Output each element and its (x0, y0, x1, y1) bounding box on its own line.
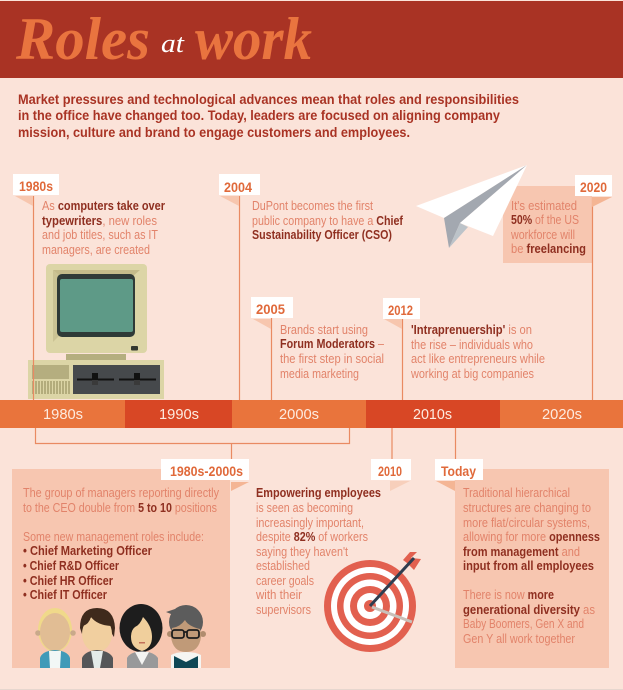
panel: 1980s-2000s: Some new management roles include: (23, 529, 204, 544)
event: 2020: 2020 (580, 179, 607, 195)
panel: today: Gen Y all work together (463, 631, 576, 646)
panel: today: from management and (463, 544, 580, 559)
intro text: Market pressures and technological advances mean that roles and responsibilities (18, 91, 519, 107)
timeline band: 2000s (279, 406, 319, 423)
event: 2005: media marketing (280, 366, 359, 381)
title: Roles (15, 6, 150, 72)
intro text: mission, culture and brand to engage customers and employees. (18, 124, 410, 140)
event: 2012 (383, 298, 545, 381)
panel: today (435, 459, 609, 668)
panel: today: structures are changing to (463, 500, 591, 515)
event: 2005 (251, 297, 385, 381)
intro text (18, 91, 519, 140)
panel: 1980s-2000s: The group of managers reporting directly (23, 485, 219, 500)
event: 2012: act like entrepreneurs while (411, 351, 545, 366)
timeline band: 2020s (542, 406, 582, 423)
event: 2020 (510, 175, 612, 256)
event: 2005: the first step in social (280, 351, 384, 366)
event: 2004: DuPont becomes the first (252, 198, 373, 213)
paper plane icon (416, 165, 527, 248)
intro text: in the office have changed too. Today, leaders are focused on aligning company (18, 107, 500, 123)
event: 2012: working at big companies (410, 366, 534, 381)
panel: 1980s-2000s (12, 459, 249, 668)
event: 2005: 2005 (256, 301, 285, 317)
2020 highlight panel (503, 186, 592, 263)
event: 1980s: and job titles, such as IT (42, 227, 158, 242)
event: 2020: workforce will (510, 227, 575, 242)
event: 1980s: managers, are created (42, 242, 150, 257)
panel: 2010: 2010 (378, 463, 402, 479)
event: 2020: It's estimated (511, 198, 577, 213)
icon: woman manager (120, 604, 162, 668)
panel: 2010: despite 82% of workers (256, 529, 368, 544)
event: 2005: Forum Moderators – (280, 336, 385, 351)
header banner (0, 1, 623, 78)
panel: today: generational diversity as (463, 602, 595, 617)
event: 2020: be freelancing (511, 241, 586, 256)
icon: man with glasses (166, 605, 206, 668)
event: 1980s (13, 174, 165, 257)
timeline band: 1990s (159, 406, 199, 423)
timeline band: 1980s (43, 406, 83, 423)
event: 2020: 50% of the US (511, 212, 579, 227)
event: 2004 (219, 174, 404, 242)
panel: 1980s-2000s: • Chief R&D Officer (23, 558, 119, 573)
icon: target with arrow (324, 552, 421, 652)
panel: 2010: is seen as becoming (256, 500, 353, 515)
panel: today: Today (441, 463, 476, 479)
timeline connectors (34, 196, 592, 488)
panel: 2010: supervisors (256, 602, 311, 617)
title: work (195, 6, 312, 72)
timeline band (0, 400, 623, 428)
title (15, 6, 312, 72)
panel: 1980s-2000s: • Chief HR Officer (23, 573, 113, 588)
title: at (161, 29, 185, 58)
event: 1980s: typewriters, new roles (42, 213, 157, 228)
icon: blonde manager (35, 608, 76, 668)
event: 2012: 2012 (388, 302, 413, 318)
panel: 1980s-2000s: to the CEO double from 5 to 10 positions (23, 500, 217, 515)
event: 2005: Brands start using (280, 322, 368, 337)
panel: today: more flat/circular systems, (463, 515, 590, 530)
icon: dark haired manager (80, 608, 115, 668)
panel: today: allowing for more openness (463, 529, 600, 544)
panel: 2010: Empowering employees (256, 485, 381, 500)
panel: 1980s-2000s: • Chief IT Officer (23, 587, 107, 602)
panel: today: Traditional hierarchical (463, 485, 570, 500)
panel: 2010: established (256, 558, 310, 573)
event: 2004: public company to have a Chief (252, 213, 404, 228)
event: 2012: 'Intraprenuership' is on (411, 322, 532, 337)
panel: today: There is now more (463, 587, 554, 602)
panel: 1980s-2000s: 1980s-2000s (170, 463, 243, 479)
event: 1980s: As computers take over (42, 198, 165, 213)
panel: 2010: increasingly important, (256, 515, 364, 530)
panel: today: input from all employees (463, 558, 594, 573)
panel: 1980s-2000s: • Chief Marketing Officer (23, 543, 152, 558)
panel: 2010: saying they haven't (256, 544, 348, 559)
event: 2012: the rise – individuals who (411, 337, 533, 352)
panel: today: Baby Boomers, Gen X and (463, 616, 584, 631)
event: 1980s: 1980s (19, 178, 53, 194)
event: 2004: 2004 (224, 179, 252, 195)
panel: 2010: with their (255, 587, 303, 602)
event: 2004: Sustainability Officer (CSO) (252, 227, 392, 242)
panel: 2010 (255, 459, 411, 617)
computer icon (28, 264, 164, 399)
timeline band: 2010s (413, 406, 452, 423)
panel: 2010: career goals (256, 573, 314, 588)
